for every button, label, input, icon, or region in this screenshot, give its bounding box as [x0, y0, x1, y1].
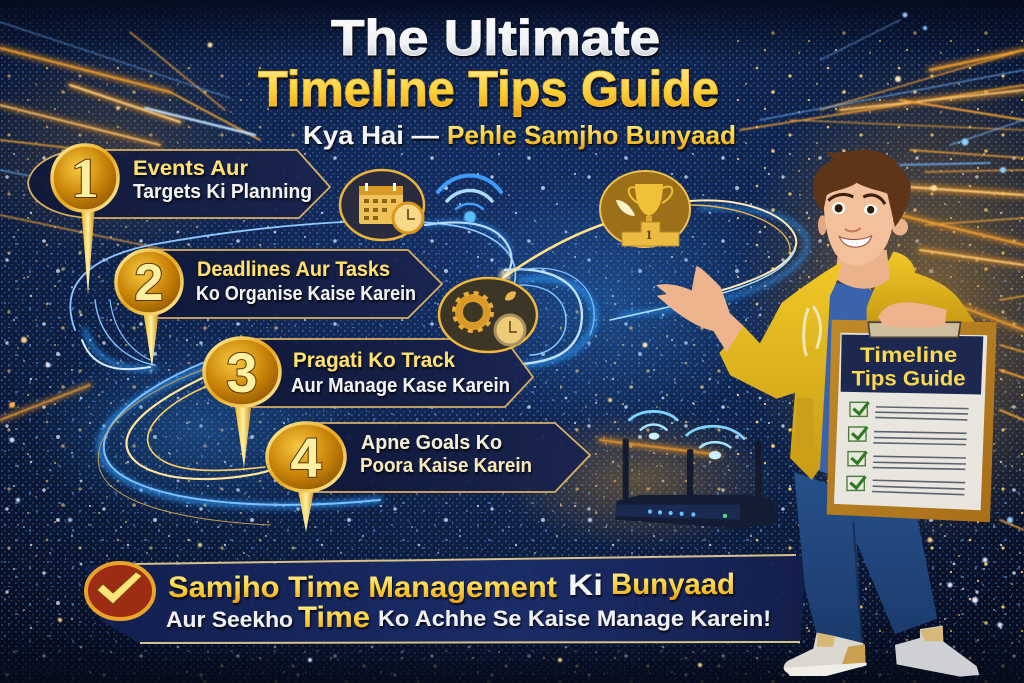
step 4 pin — [297, 485, 315, 532]
step 1 banner — [28, 150, 330, 218]
banner headline: Bunyaad — [611, 568, 735, 601]
step 1 pin — [81, 205, 95, 295]
step 1 coin — [52, 145, 118, 211]
subtitle: Kya Hai — — [303, 120, 439, 150]
step 2 text: Deadlines Aur Tasks — [197, 258, 390, 281]
icon: wifi signal — [438, 176, 501, 223]
icon: trophy on podium: 1 — [646, 227, 652, 242]
step 4 text — [360, 432, 532, 477]
banner headline: Ki — [568, 569, 603, 602]
step 2 coin: 2 — [135, 254, 163, 312]
swirling light trails — [70, 200, 807, 525]
banner subline: Ko Achhe Se Kaise Manage Karein! — [378, 606, 771, 631]
step 1 text — [133, 157, 312, 203]
face details — [828, 194, 853, 201]
step 3 text — [291, 349, 510, 397]
icon: router with wifi — [615, 411, 775, 529]
clipboard title line 2: Tips Guide — [852, 367, 966, 391]
step 2 — [116, 250, 442, 368]
step 2 text: Ko Organise Kaise Karein — [196, 283, 416, 305]
clipboard — [827, 302, 997, 522]
step 2 banner — [150, 250, 442, 318]
icon: gear and clock — [439, 278, 537, 352]
character presenting clipboard — [656, 150, 997, 677]
subtitle: Pehle Samjho Bunyaad — [447, 120, 736, 150]
icon: check badge — [86, 563, 154, 619]
step 1 text: Targets Ki Planning — [133, 181, 312, 203]
bottom banner — [85, 555, 806, 644]
hoodie back and shoulders — [867, 252, 975, 322]
step 1 — [28, 145, 330, 295]
step 3 banner — [242, 339, 533, 407]
step 4 text: Poora Kaise Karein — [360, 455, 532, 477]
banner headline — [168, 568, 735, 604]
icon: trophy on podium — [600, 171, 690, 247]
checklist — [847, 402, 969, 495]
subtitle — [303, 120, 736, 150]
step 3 text: Aur Manage Kase Karein — [291, 375, 510, 397]
wifi signals — [629, 411, 744, 459]
step 2 pin — [143, 310, 159, 368]
step 4 text: Apne Goals Ko — [361, 432, 502, 454]
step 1 coin: 1 — [71, 148, 99, 210]
neck and head — [813, 150, 911, 289]
jeans — [794, 472, 937, 642]
step 4 coin — [267, 423, 345, 491]
title line 1: The Ultimate — [331, 10, 660, 66]
step 3 — [204, 338, 533, 468]
step 2 coin — [116, 250, 182, 314]
title — [258, 10, 736, 150]
step 2 text — [196, 258, 416, 305]
pointing hand — [656, 266, 743, 352]
shoes — [783, 626, 979, 677]
step 4 coin: 4 — [290, 426, 322, 489]
banner headline: Samjho Time Management — [168, 571, 557, 604]
hair — [813, 150, 911, 227]
step 3 text: Pragati Ko Track — [293, 349, 455, 372]
step 4 — [267, 423, 590, 532]
step 3 pin — [234, 400, 252, 468]
step 3 coin: 3 — [226, 341, 258, 404]
banner subline: Time — [298, 601, 370, 634]
clipboard title: Timeline — [860, 344, 957, 367]
step 4 banner — [306, 423, 590, 492]
step 3 coin — [204, 338, 280, 406]
step 1 text: Events Aur — [133, 157, 248, 180]
title line 2: Timeline Tips Guide — [258, 61, 719, 117]
icon: calendar and clock — [340, 170, 424, 240]
t-shirt — [813, 282, 878, 483]
banner subline — [166, 601, 771, 634]
hoodie front and sleeve — [719, 262, 841, 480]
banner subline: Aur Seekho — [166, 607, 293, 632]
